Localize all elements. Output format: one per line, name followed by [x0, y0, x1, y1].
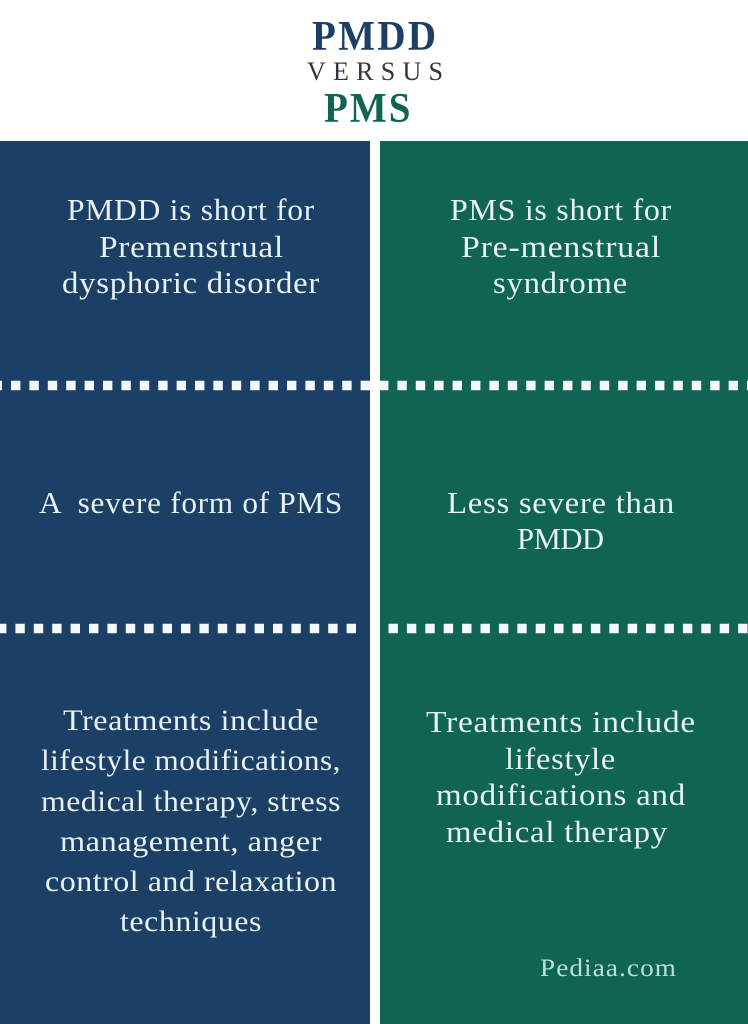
text: PMDD treatments: techniques	[120, 905, 262, 938]
divider: second row dots left	[0, 624, 362, 633]
text: PMS treatments: lifestyle	[505, 742, 616, 776]
text: PMDD treatments: medical therapy, stress	[41, 785, 341, 818]
text: PMDD definition	[62, 193, 320, 300]
logo: Pediaa.com: Pediaa.com	[540, 955, 677, 982]
text: PMS definition	[450, 193, 672, 300]
text: PMDD definition: dysphoric disorder	[62, 266, 320, 300]
text: PMS severity	[447, 486, 675, 556]
text: PMS treatments: Treatments include	[426, 705, 696, 739]
divider: first row dots	[0, 381, 748, 390]
text: PMDD treatments: Treatments include	[63, 704, 319, 737]
text: PMDD definition: Premenstrual	[99, 230, 284, 264]
text: PMDD severity: A severe form of PMS	[39, 486, 343, 520]
text: PMS severity: PMDD	[517, 522, 604, 556]
text: PMS treatments: medical therapy	[446, 815, 668, 849]
title: PMS: PMS	[324, 85, 413, 131]
divider: second row dots right	[388, 624, 748, 633]
title: PMDD: PMDD	[312, 13, 438, 59]
panel: PMS column	[380, 141, 748, 1024]
text: PMS treatments	[426, 705, 696, 849]
text: PMS severity: Less severe than	[447, 486, 675, 520]
text: PMS treatments: modifications and	[436, 778, 686, 812]
text: PMS definition: Pre-menstrual	[461, 230, 661, 264]
text: PMDD treatments	[41, 704, 341, 938]
title: VERSUS: VERSUS	[307, 57, 443, 86]
text: PMDD treatments: lifestyle modifications,	[41, 744, 341, 777]
text: PMS definition: PMS is short for	[450, 193, 672, 227]
text: PMDD treatments: control and relaxation	[45, 865, 337, 898]
panel: PMDD column	[0, 141, 370, 1024]
text: PMDD definition: PMDD is short for	[67, 193, 315, 227]
text: PMDD treatments: management, anger	[60, 825, 322, 858]
text: PMS definition: syndrome	[493, 266, 628, 300]
